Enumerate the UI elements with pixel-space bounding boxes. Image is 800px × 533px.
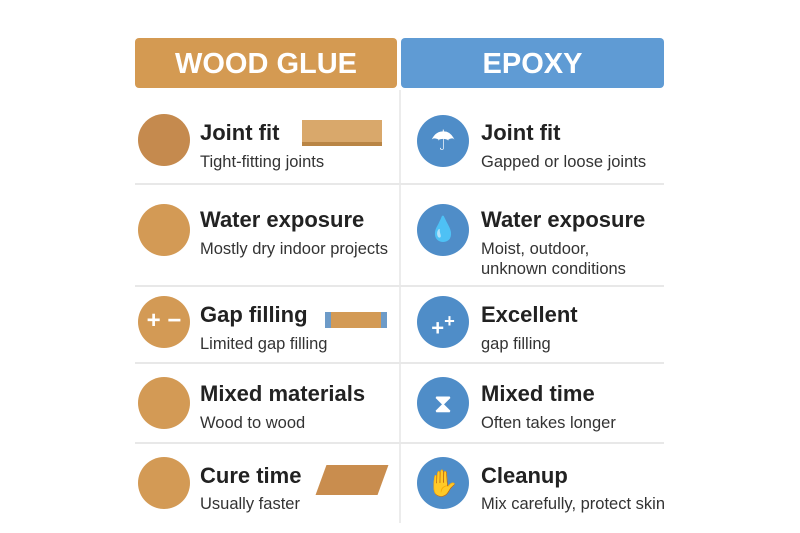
sub: Mix carefully, protect skin (481, 495, 665, 513)
icon: wood stack (316, 465, 388, 495)
icon: joint (138, 114, 190, 166)
header: wood glue: WOOD GLUE (175, 48, 357, 80)
icon: drops: 💧 (428, 216, 458, 243)
icon: cloud (138, 204, 190, 256)
icon: plus minus: + − (147, 307, 181, 334)
icon: gloves (417, 457, 469, 509)
sub: Mostly dry indoor projects (200, 240, 388, 258)
icon: hourglass (417, 377, 469, 429)
sub: Moist, outdoor, (481, 240, 589, 258)
icon: wood planks (302, 120, 382, 146)
header: wood glue (135, 38, 397, 88)
title: excellent: Excellent (481, 302, 578, 327)
sub: Usually faster (200, 495, 300, 513)
title: mixed materials: Mixed materials (200, 381, 365, 406)
title: gap filling: Gap filling (200, 302, 308, 327)
sub: Limited gap filling (200, 335, 328, 353)
sub (481, 240, 626, 278)
icon: hourglass: ⧗ (434, 388, 452, 418)
sub: Wood to wood (200, 414, 305, 432)
title: joint fit: Joint fit (200, 120, 279, 145)
icon: cure (138, 457, 190, 509)
title: water exposure: Water exposure (200, 207, 364, 232)
sub: gap filling (481, 335, 551, 353)
icon: drops (417, 204, 469, 256)
title: cure time: Cure time (200, 463, 301, 488)
panel: wood glue rows (138, 114, 388, 513)
icon: materials (138, 377, 190, 429)
header: epoxy (401, 38, 664, 88)
title: joint fit: Joint fit (481, 120, 560, 145)
title: water exposure: Water exposure (481, 207, 645, 232)
sub: Gapped or loose joints (481, 153, 646, 171)
icon: plus (417, 296, 469, 348)
icon: gap board (325, 312, 387, 328)
icon: umbrella: ☂ (430, 125, 456, 156)
header: epoxy: EPOXY (483, 48, 582, 80)
icon: umbrella (417, 115, 469, 167)
icon: plus minus (138, 296, 190, 348)
icon: plus: ++ (431, 310, 455, 340)
sub: Tight-fitting joints (200, 153, 324, 171)
title: cleanup: Cleanup (481, 463, 568, 488)
panel: epoxy rows (417, 115, 665, 513)
sub: Often takes longer (481, 414, 616, 432)
icon: gloves: ✋ (427, 468, 459, 498)
title: mixed time: Mixed time (481, 381, 595, 406)
sub: unknown conditions (481, 260, 626, 278)
